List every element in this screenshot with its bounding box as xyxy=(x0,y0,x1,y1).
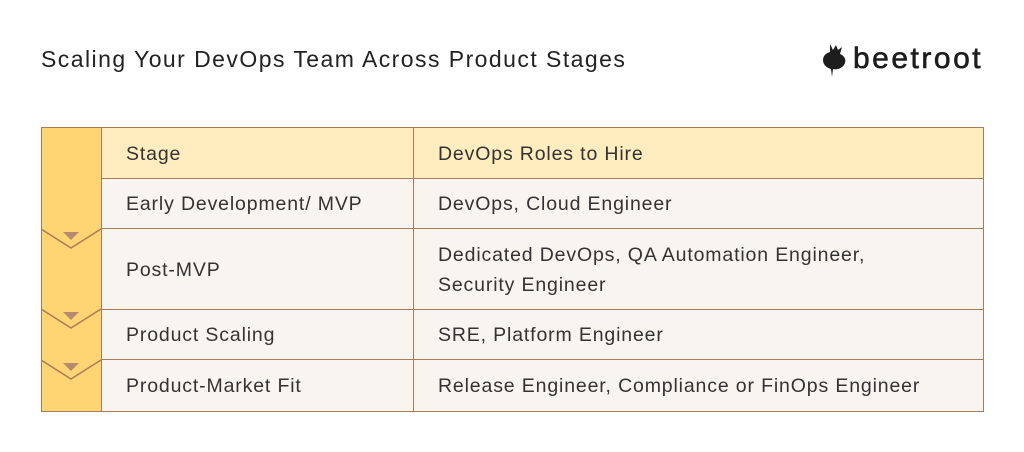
icon: beet xyxy=(823,44,846,77)
table: Product Scaling xyxy=(126,324,275,346)
row: scaling xyxy=(102,310,984,359)
table: Stage xyxy=(126,142,181,164)
table: Post-MVP xyxy=(126,258,221,280)
logo: beetroot xyxy=(853,42,983,75)
table: DevOps Roles to Hire xyxy=(438,142,644,164)
table: Security Engineer xyxy=(438,274,606,296)
left arrow column xyxy=(41,127,102,412)
chevron 3 xyxy=(40,360,100,378)
row: pmf xyxy=(102,359,984,412)
table: Release Engineer, Compliance or FinOps Engineer xyxy=(438,375,920,397)
chevron 1 xyxy=(40,228,100,248)
table: Dedicated DevOps, QA Automation Engineer, xyxy=(438,244,865,266)
table: Product-Market Fit xyxy=(126,375,302,397)
row: post-mvp xyxy=(102,228,984,309)
row: early xyxy=(102,179,984,228)
table: SRE, Platform Engineer xyxy=(438,324,664,346)
title: Scaling Your DevOps Team Across Product Stages xyxy=(41,46,626,72)
chevron 2 xyxy=(40,308,100,328)
table: DevOps, Cloud Engineer xyxy=(438,193,672,215)
table xyxy=(41,127,984,412)
table: Early Development/ MVP xyxy=(126,193,363,215)
header row xyxy=(102,127,984,178)
